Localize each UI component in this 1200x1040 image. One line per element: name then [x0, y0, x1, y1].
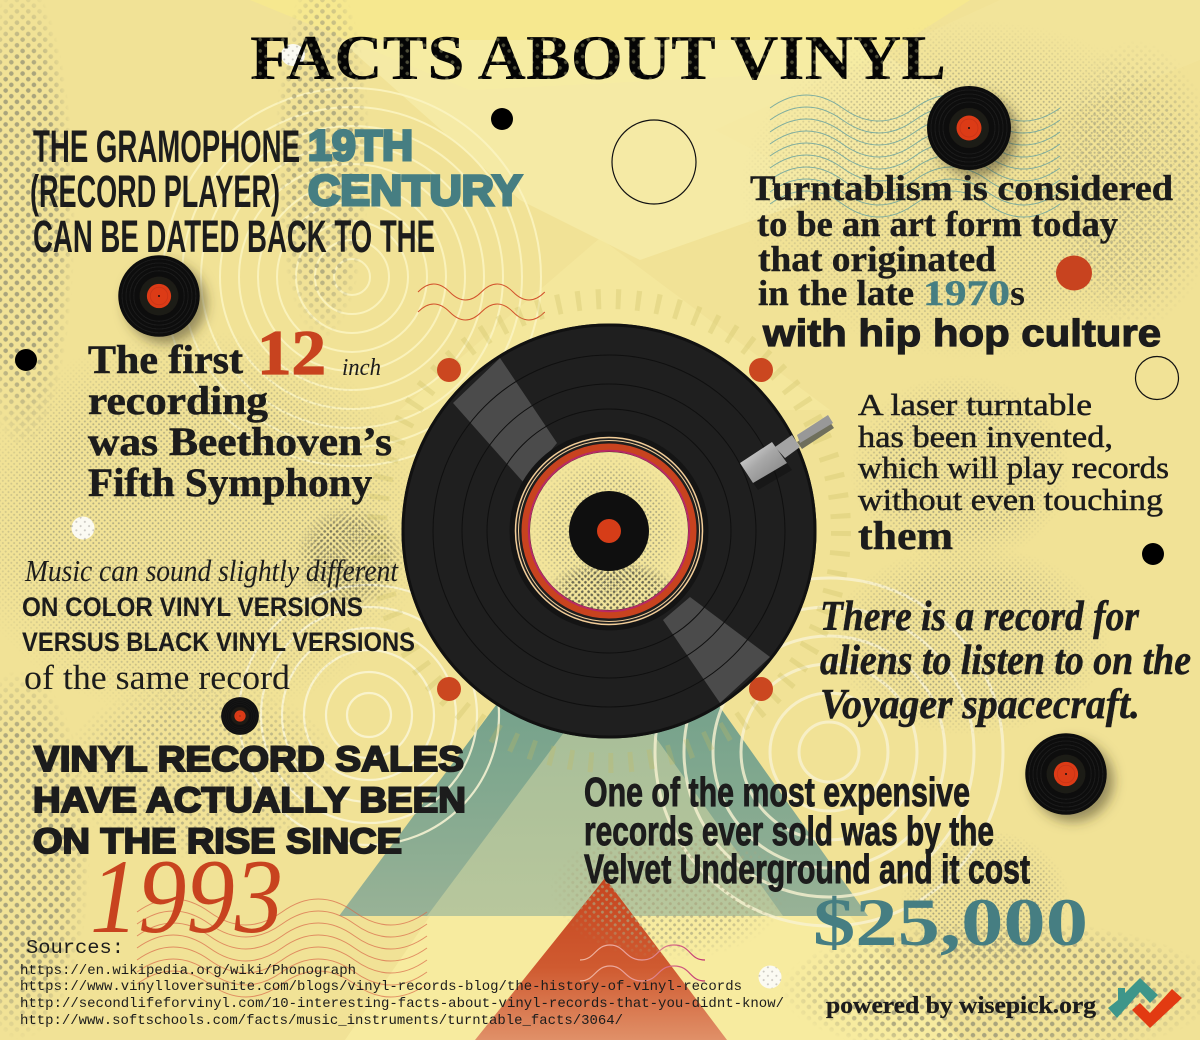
price: $25,000	[813, 884, 1088, 960]
colour vinyl fact: ON COLOR VINYL VERSIONS	[22, 592, 363, 622]
sources: https://www.vinylloversunite.com/blogs/vinyl-records-blog/the-history-of-vinyl-records	[20, 979, 742, 995]
turntablism fact: in the late	[758, 273, 914, 313]
gramophone fact: (RECORD PLAYER)	[30, 166, 280, 217]
expensive record fact: Velvet Underground and it cost	[584, 846, 1030, 892]
outline circle top	[612, 120, 696, 204]
small record right	[1025, 733, 1107, 815]
red triangle	[475, 878, 727, 1040]
solid black dot right	[1142, 543, 1164, 565]
laser turntable fact: them	[858, 513, 953, 558]
19th century highlight: CENTURY	[308, 167, 522, 215]
concentric rings lower left	[239, 585, 499, 845]
twelve inch fact: 12	[257, 317, 326, 388]
main vinyl record	[402, 324, 816, 738]
colour vinyl fact: VERSUS BLACK VINYL VERSIONS	[22, 627, 415, 657]
turntablism fact: Turntablism is considered	[750, 168, 1173, 208]
teal wave lines	[770, 95, 1060, 217]
year 1993: 1993	[90, 838, 283, 955]
expensive record fact: records ever sold was by the	[584, 808, 994, 854]
gramophone fact: CAN BE DATED BACK TO THE	[33, 211, 435, 262]
solid black dot	[491, 108, 513, 130]
twelve inch fact: Fifth Symphony	[88, 460, 372, 505]
sales fact: HAVE ACTUALLY BEEN	[33, 781, 466, 820]
sales fact: VINYL RECORD SALES	[34, 740, 464, 779]
record centre label	[569, 491, 649, 571]
record sheen	[453, 358, 770, 703]
title: FACTS ABOUT VINYL	[250, 23, 946, 93]
twelve inch fact: was Beethoven’s	[88, 419, 392, 464]
sources: https://en.wikipedia.org/wiki/Phonograph	[20, 963, 356, 979]
white dot bottom	[758, 966, 782, 988]
laser turntable fact: A laser turntable	[858, 387, 1092, 422]
turntablism fact: s	[1010, 273, 1025, 313]
twelve inch fact: recording	[88, 378, 268, 423]
small record left	[118, 255, 200, 337]
colour vinyl fact: of the same record	[24, 658, 291, 697]
turntablism fact: with hip hop culture	[762, 313, 1161, 355]
turntablism fact	[750, 168, 1173, 355]
red wave lines lower left	[137, 899, 427, 997]
red dot	[1056, 256, 1092, 290]
sales fact	[33, 740, 466, 955]
19th century highlight	[308, 122, 522, 215]
gramophone fact	[30, 121, 522, 262]
voyager fact: Voyager spacecraft.	[820, 682, 1140, 728]
laser turntable fact	[858, 387, 1169, 558]
red dots behind record	[437, 358, 773, 701]
gramophone fact: THE GRAMOPHONE	[33, 121, 300, 172]
outline circle right	[1136, 356, 1178, 400]
white dot left	[72, 516, 94, 540]
turntablism fact: that originated	[758, 239, 996, 279]
voyager fact: There is a record for	[820, 594, 1140, 640]
concentric rings top left	[163, 88, 541, 466]
tonearm stylus	[740, 415, 834, 490]
laser turntable fact: has been invented,	[858, 419, 1113, 454]
small record top right	[927, 86, 1011, 170]
record grooves	[433, 355, 785, 707]
sales fact: ON THE RISE SINCE	[33, 822, 402, 861]
voyager fact	[820, 594, 1191, 728]
twelve inch fact: The first	[88, 337, 244, 382]
colour vinyl fact: Music can sound slightly different	[24, 553, 399, 588]
twelve inch fact	[88, 317, 392, 505]
sources	[20, 937, 784, 1029]
expensive record fact	[584, 769, 1088, 960]
concentric rings lower right	[655, 578, 1003, 926]
tiny record	[221, 697, 259, 735]
teal triangle	[339, 552, 868, 916]
record spindle hole backdrop	[519, 441, 699, 621]
footer brand: powered by wisepick.org	[826, 993, 1096, 1019]
white dot top	[281, 44, 305, 66]
light green inner triangle	[427, 672, 783, 916]
radial ticks around record	[377, 299, 841, 763]
sources: http://secondlifeforvinyl.com/10-interesting-facts-about-vinyl-records-that-you-didnt-know/	[20, 996, 784, 1012]
laser turntable fact: which will play records	[858, 450, 1169, 485]
colour vinyl fact	[22, 553, 415, 697]
sources: Sources:	[26, 937, 124, 959]
turntablism fact: to be an art form today	[757, 204, 1118, 244]
twelve inch fact: inch	[342, 355, 381, 381]
laser turntable fact: without even touching	[858, 482, 1163, 517]
turntablism fact: 1970	[923, 273, 1010, 313]
expensive record fact: One of the most expensive	[584, 769, 970, 815]
sources: http://www.softschools.com/facts/music_instruments/turntable_facts/3064/	[20, 1013, 623, 1029]
red wave lines top	[418, 284, 545, 320]
solid black dot left	[15, 349, 37, 371]
magenta wave lines on triangle	[580, 945, 705, 981]
19th century highlight: 19TH	[308, 122, 413, 170]
logo	[1108, 978, 1182, 1028]
